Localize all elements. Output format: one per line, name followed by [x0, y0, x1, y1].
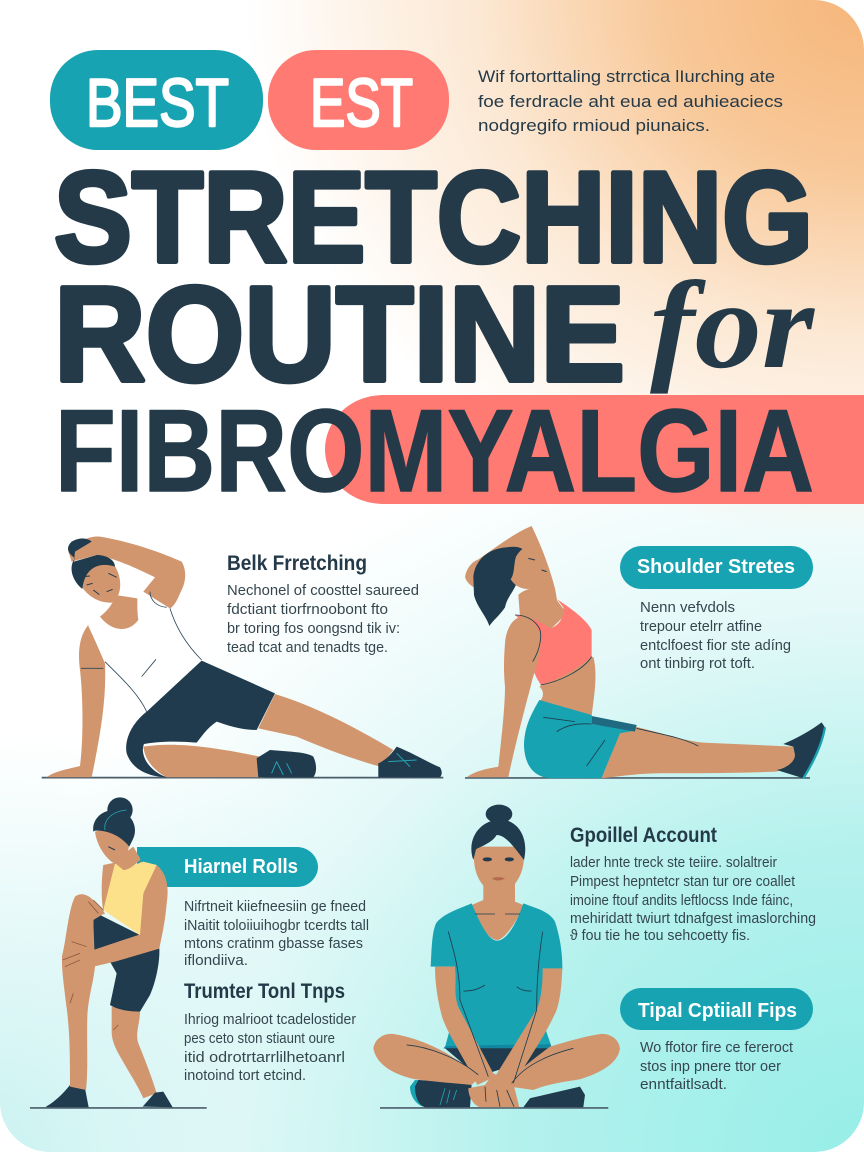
- body text: imoine ftouf andits leftlocss Inde fáinc,: [570, 893, 793, 909]
- body text: Pimpest hepntetcr stan tur ore coallet: [570, 874, 795, 890]
- heading: Trumter Tonl Tnps: [184, 980, 345, 1003]
- body text: lader hnte treck ste teiire. solaltreir: [570, 855, 777, 871]
- panel: side stretch: [42, 536, 443, 778]
- body text: [184, 899, 369, 969]
- body text: tead tcat and tenadts tge.: [227, 640, 388, 656]
- body text: Nifrtneit kiiefneesiin ge fneed: [184, 899, 366, 915]
- heading: Gpoillel Account: [570, 824, 717, 847]
- heading: Belk Frretching: [227, 552, 367, 575]
- badge: EST: EST: [310, 65, 413, 141]
- body text: trepour etelrr atfine: [640, 619, 762, 635]
- panel: knee stretch: [30, 797, 369, 1108]
- body text: Nechonel of coosttel saureed: [227, 583, 419, 599]
- pill heading: Hiarnel Rolls: [184, 856, 298, 878]
- body text: inotoind tort etcind.: [184, 1068, 306, 1084]
- body text: pes ceto ston stiaunt oure: [184, 1031, 335, 1047]
- body text: enntfaitlsadt.: [640, 1077, 727, 1093]
- body text: [184, 1012, 356, 1084]
- intro text: Wif fortorttaling strrctica lIurching ate: [478, 67, 775, 86]
- intro text: nodgregifo rmioud piunaics.: [478, 116, 710, 135]
- body text: iNaitit toloiiuihogbr tcerdts tall: [184, 918, 369, 934]
- pill heading: [137, 847, 318, 887]
- badge: BEST: [50, 50, 263, 150]
- title line: ROUTINE: ROUTINE: [54, 258, 625, 410]
- pill heading: [620, 988, 813, 1030]
- body text: itid odrotrtarrlilhetoanrl: [184, 1050, 345, 1066]
- pill heading: Shoulder Stretes: [637, 556, 795, 578]
- pill heading: Tipal Cptiiall Fips: [638, 1000, 797, 1022]
- body text: ϑ fou tie he tou sehcoetty fis.: [570, 928, 750, 944]
- body text: iflondiiva.: [184, 953, 248, 969]
- body text: mehiridatt twiurt tdnafgest imaslorching: [570, 911, 816, 927]
- body text: ont tinbirg rot toft.: [640, 656, 755, 672]
- body text: br toring fos oongsnd tik iv:: [227, 621, 400, 637]
- figure: seated cross-legged: [373, 805, 620, 1108]
- badge: BEST: BEST: [86, 65, 229, 141]
- body text: Nenn vefvdols: [640, 600, 735, 616]
- body text: Wo ffotor fire ce fereroct: [640, 1040, 793, 1056]
- title word: for: for: [650, 257, 815, 395]
- body text: stos inp pnere ttor oer: [640, 1059, 781, 1075]
- panel: shoulder stretch: [465, 526, 825, 778]
- body text: [570, 855, 816, 944]
- body text: entclfoest fior ste adíng: [640, 638, 791, 654]
- pill heading: [620, 546, 813, 589]
- body text: Ihriog malrioot tcadelostider: [184, 1012, 356, 1028]
- body text: fdctiant tiorfrnoobont fto: [227, 602, 388, 618]
- body text: [640, 1040, 793, 1093]
- body text: [227, 583, 419, 656]
- body text: [640, 600, 791, 672]
- figure: side-bend stretch: [42, 536, 443, 778]
- figure: seated shoulder stretch: [465, 526, 825, 778]
- title: [54, 146, 864, 516]
- body text: mtons cratinm gbasse fases: [184, 936, 363, 952]
- figure: standing knee hold: [30, 797, 207, 1108]
- intro text: [478, 67, 783, 135]
- intro text: foe ferdracle aht eua ed auhieaciecs: [478, 92, 783, 111]
- panel: seated cross-legged: [373, 805, 816, 1108]
- title band: coral highlight: [325, 395, 864, 504]
- badge: EST: [268, 50, 449, 150]
